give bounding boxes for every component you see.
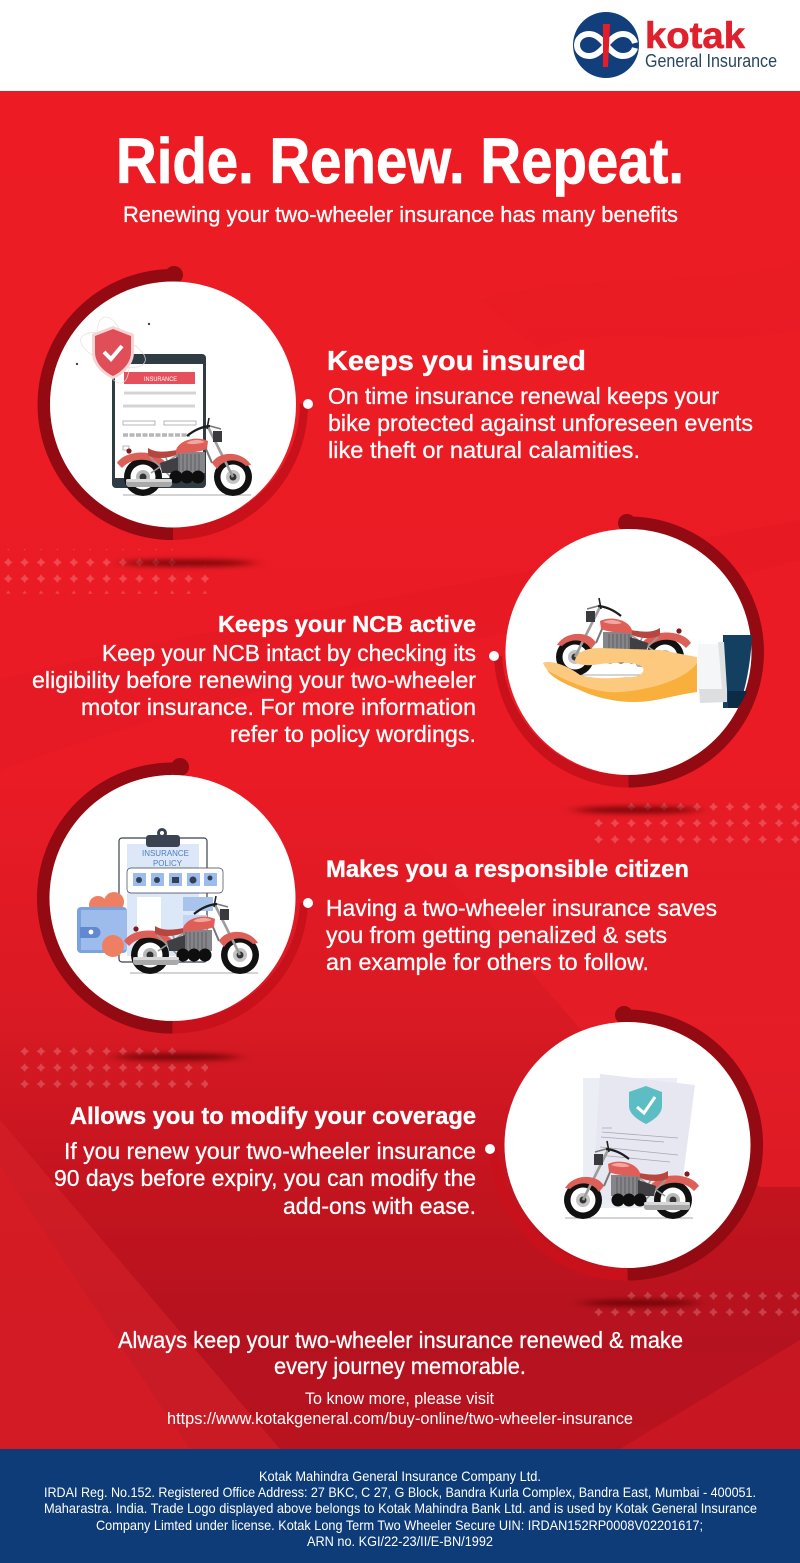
- panel: allows you to modify your coverage: [54, 1006, 757, 1281]
- text block: makes you a responsible citizen: an example for others to follow.: [326, 949, 649, 975]
- website link text: [167, 1390, 633, 1428]
- dotted pattern and shadow: item 4: [582, 1289, 800, 1322]
- header bar: [0, 0, 800, 91]
- text block: keeps you insured: like theft or natural calamities.: [328, 437, 640, 463]
- illustration: policy clipboard, wallet and bike: POLICY: [153, 859, 183, 868]
- logo: Kotak General Insurance: kotak: [645, 15, 745, 56]
- heading: makes you a responsible citizen: Makes you a responsible citizen: [326, 856, 689, 883]
- heading: allows you to modify your coverage: Allows you to modify your coverage: [70, 1103, 476, 1130]
- text block: keeps you insured: On time insurance renewal keeps your: [328, 383, 719, 409]
- illustration: insurance phone and bike: INSURANCE: [144, 376, 178, 383]
- footer bar: [0, 1449, 800, 1563]
- text block: keeps you insured: bike protected against unforeseen events: [328, 410, 753, 436]
- footer disclaimer text: ARN no. KGI/22-23/II/E-BN/1992: [307, 1534, 493, 1549]
- text block: allows you to modify your coverage: add-ons with ease.: [283, 1193, 476, 1219]
- text block: makes you a responsible citizen: you from getting penalized & sets: [326, 922, 667, 948]
- footer disclaimer text: Kotak Mahindra General Insurance Company Ltd.: [259, 1469, 541, 1484]
- text block: keeps you insured: [328, 383, 753, 463]
- website link text: https://www.kotakgeneral.com/buy-online/two-wheeler-insurance: [167, 1410, 633, 1428]
- text block: allows you to modify your coverage: If you renew your two-wheeler insurance: [64, 1138, 476, 1164]
- dotted pattern and shadow: item 2: [575, 795, 800, 844]
- footer disclaimer text: [44, 1469, 757, 1549]
- website link text: To know more, please visit: [305, 1390, 494, 1408]
- text block: makes you a responsible citizen: [326, 895, 717, 975]
- panel: keeps you insured: [44, 266, 753, 540]
- text block: keeps your NCB active: [32, 640, 476, 747]
- heading: keeps you insured: Keeps you insured: [327, 345, 586, 376]
- footer disclaimer text: Maharastra. India. Trade Logo displayed above belongs to Kotak Mahindra Bank Ltd. and is used by Kotak General Insurance: [44, 1501, 757, 1516]
- text block: keeps your NCB active: Keep your NCB intact by checking its: [102, 640, 476, 666]
- illustration: insurance phone and bike: [76, 314, 252, 496]
- title: Ride. Renew. Repeat.: [116, 125, 684, 197]
- closing message: Always keep your two-wheeler insurance renewed & make: [118, 1327, 683, 1353]
- circle frame 4: [485, 1006, 757, 1281]
- text block: keeps your NCB active: eligibility before renewing your two-wheeler: [32, 667, 476, 693]
- text block: makes you a responsible citizen: Having a two-wheeler insurance saves: [326, 895, 717, 921]
- panel: keeps your NCB active: [32, 514, 758, 788]
- circle frame 2: [489, 514, 758, 788]
- text block: allows you to modify your coverage: [54, 1138, 476, 1219]
- illustration: policy clipboard, wallet and bike: [77, 828, 259, 974]
- closing message: every journey memorable.: [274, 1353, 526, 1379]
- footer disclaimer text: IRDAI Reg. No.152. Registered Office Address: 27 BKC, C 27, G Block, Bandra Kurla Complex, Bandra East, Mumbai - 400051.: [44, 1485, 756, 1500]
- illustration: hand holding bike: [543, 598, 752, 708]
- logo: Kotak General Insurance: [573, 12, 777, 78]
- illustration: policy papers and bike: [564, 1074, 699, 1219]
- logo: Kotak General Insurance: General Insurance: [645, 51, 777, 71]
- dotted pattern and shadow: item 1: [4, 549, 254, 594]
- circle frame 3: [43, 758, 313, 1034]
- panel: makes you a responsible citizen: [43, 758, 717, 1034]
- circle frame 1: [44, 266, 313, 540]
- dotted pattern and shadow: item 3: [20, 1040, 239, 1089]
- heading: keeps your NCB active: Keeps your NCB active: [218, 611, 476, 637]
- text block: keeps your NCB active: refer to policy wordings.: [230, 721, 476, 747]
- footer disclaimer text: Company Limted under license. Kotak Long Term Two Wheeler Secure UIN: IRDAN152RP0008V02201617;: [96, 1518, 703, 1533]
- text block: allows you to modify your coverage: 90 days before expiry, you can modify the: [54, 1165, 476, 1191]
- subtitle: Renewing your two-wheeler insurance has many benefits: [123, 202, 678, 227]
- text block: keeps your NCB active: motor insurance. For more information: [81, 694, 476, 720]
- illustration: policy clipboard, wallet and bike: INSURANCE: [142, 849, 189, 858]
- closing message: [118, 1327, 683, 1379]
